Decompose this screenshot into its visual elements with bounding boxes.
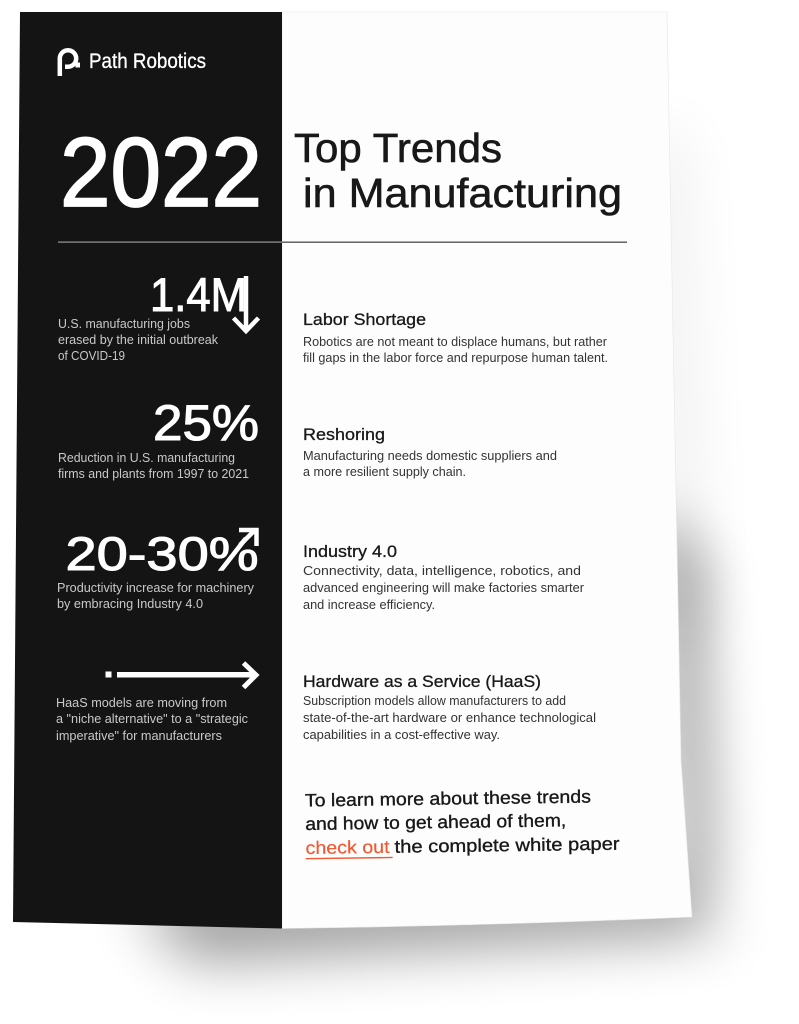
title: in Manufacturing [303,170,622,216]
trend: Hardware as a Service: state-of-the-art hardware or enhance technological [303,710,596,725]
stat: 20-30%: 20-30% [66,527,258,580]
trend: Reshoring: Reshoring [303,425,385,444]
trend: Industry 4.0 [303,542,585,612]
trend: Labor Shortage [303,310,608,365]
stat text: HaaS: imperative" for manufacturers [56,728,222,743]
stat text: HaaS: a "niche alternative" to a "strategic [56,711,248,726]
stat text: jobs: of COVID-19 [58,348,125,363]
black side panel [13,12,282,928]
call to action: and how to get ahead of them, [305,810,566,834]
trend: Hardware as a Service: Subscription models allow manufacturers to add [303,693,566,708]
header divider [58,242,627,243]
stat text: firms: firms and plants from 1997 to 2021 [58,466,249,481]
trend: Reshoring [303,425,557,479]
call to action [305,786,620,859]
trend: Industry 4.0: Industry 4.0 [303,542,397,561]
stat text: jobs [58,316,218,363]
stat text: productivity: by embracing Industry 4.0 [57,596,203,611]
paper sheet [282,12,692,928]
trend: Industry 4.0: advanced engineering will make factories smarter [303,580,585,595]
stat text: productivity [57,580,254,611]
trend: Reshoring: Manufacturing needs domestic suppliers and [303,448,557,463]
icon: long right arrow [106,663,256,688]
trend: Labor Shortage: fill gaps in the labor force and repurpose human talent. [303,350,608,365]
stat text: jobs: erased by the initial outbreak [58,332,218,347]
trend: Reshoring: a more resilient supply chain. [303,464,466,479]
call to action: check out [305,837,390,858]
logo: Path Robotics [60,50,206,76]
page drop shadow [135,130,722,958]
stat text: firms [58,450,249,481]
trend: Industry 4.0: Connectivity, data, intelligence, robotics, and [303,563,581,578]
call to action: To learn more about these trends [305,787,591,810]
stat: 25%: 25% [153,395,259,451]
stat text: productivity: Productivity increase for machinery [57,580,254,595]
icon: down arrow [234,276,258,331]
trend: Hardware as a Service: capabilities in a cost-effective way. [303,727,500,742]
stat text: HaaS: HaaS models are moving from [56,695,227,710]
year heading: 2022 [60,117,262,227]
stat text: jobs: U.S. manufacturing jobs [58,316,190,331]
icon: up-right arrow [239,530,256,546]
title [294,125,622,216]
trend: Labor Shortage: Labor Shortage [303,310,426,329]
trend: Labor Shortage: Robotics are not meant to displace humans, but rather [303,334,608,349]
stat text: HaaS [56,695,248,743]
title: Top Trends [294,125,502,171]
stat: 1.4M: 1.4M [150,268,247,321]
link underline [306,857,393,859]
trend: Industry 4.0: and increase efficiency. [303,597,435,612]
trend: Hardware as a Service [303,672,596,742]
logo: Path Robotics: Path Robotics [89,50,206,73]
stat text: firms: Reduction in U.S. manufacturing [58,450,235,465]
trend: Hardware as a Service: Hardware as a Service (HaaS) [303,672,541,691]
call to action: the complete white paper [394,834,620,857]
